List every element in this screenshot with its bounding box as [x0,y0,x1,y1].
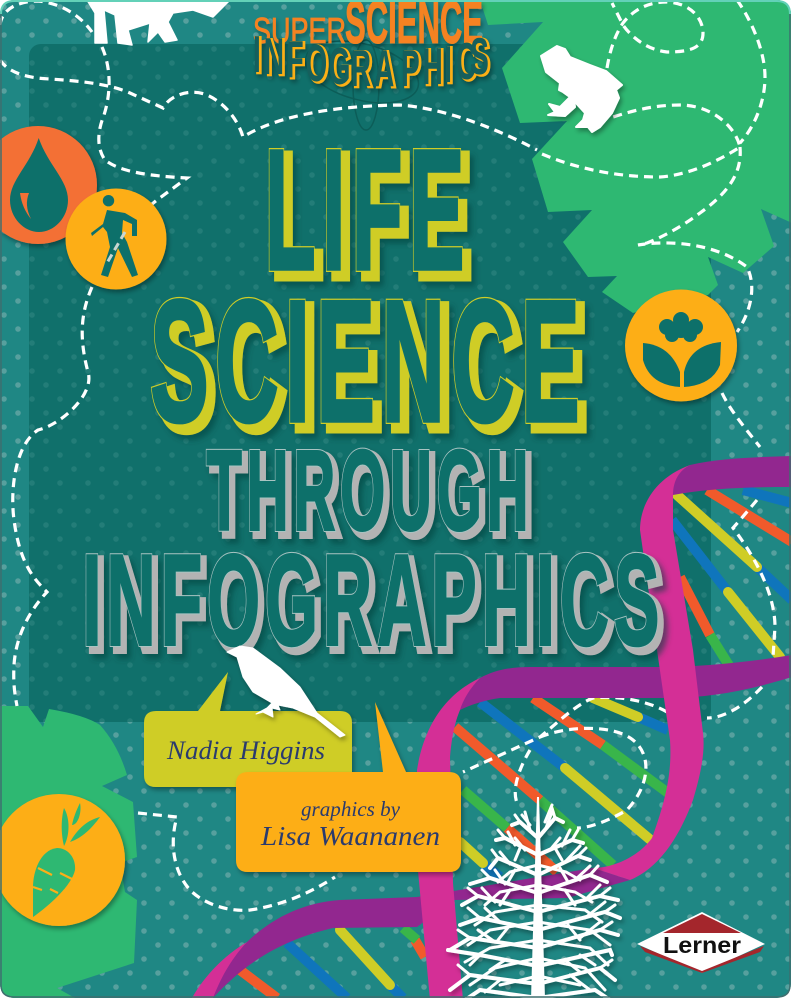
title: LIFE [268,148,478,289]
series logo: INFOGRAPHICS [255,26,491,98]
background frame: LIFE [272,122,478,312]
speech bubble: author [144,672,352,787]
icon: water drop circle [0,126,97,244]
Lerner logo [637,912,765,973]
speech bubble: illustrator: Lisa Waananen [260,821,440,851]
icon: bird silhouette [227,646,345,737]
icon: flower circle [625,290,737,402]
speech bubble: illustrator [236,702,461,872]
title: THROUGH [206,448,538,546]
icon: carrot circle [0,794,125,926]
DNA rungs [240,490,792,998]
icon: white pine tree [448,797,620,1000]
green leaf top right [480,0,792,313]
title: LIFE: LIFE [265,116,471,306]
title: SCIENCE [150,296,592,442]
series logo: INFOGRAPHICS [253,25,489,97]
icon: walking person circle [66,188,166,290]
series logo: SUPER [253,10,346,51]
icon: frog silhouette [541,46,622,132]
speech bubble: illustrator: graphics by [301,797,401,821]
atom outline behind logo [305,39,420,131]
green leaf bottom left [0,706,137,998]
title: LIFE: LIFE [265,116,471,306]
Lerner logo: Lerner [663,932,741,958]
title: INFOGRAPHICS [86,552,672,662]
speech bubble: author: Nadia Higgins [166,736,325,765]
DNA ribbons [192,456,792,1000]
icon: rhino silhouette [87,0,230,45]
inner dark panel [29,44,711,722]
